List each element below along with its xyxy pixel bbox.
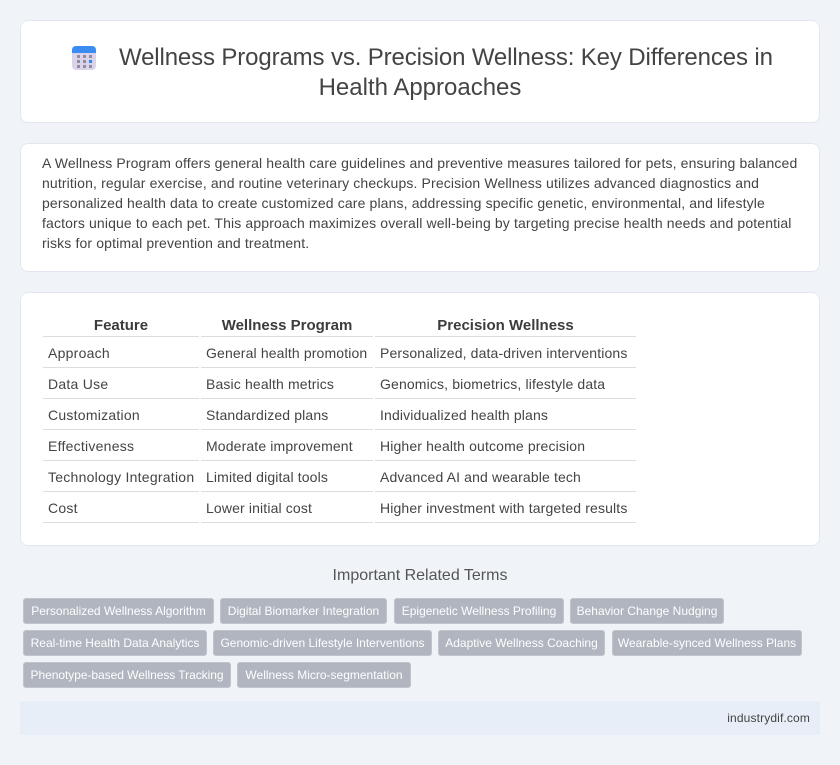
text: summary paragraph [42,155,797,251]
comparison table: Higher investment with targeted results [380,500,627,516]
comparison table: Wellness Program [222,317,352,334]
icon: calendar [72,46,96,70]
text: summary paragraph: factors unique to each pet. This approach maximizes overall well-being by targeting precise health needs and potential [42,215,792,231]
related term tags: Wearable-synced Wellness Plans [618,636,796,650]
related term tags: Personalized Wellness Algorithm [31,604,206,618]
related term tags: Behavior Change Nudging [577,604,717,618]
related term tags: Epigenetic Wellness Profiling [402,604,556,618]
comparison table: Individualized health plans [380,407,548,423]
comparison table: Data Use [48,376,108,392]
panel: summary [20,143,820,272]
related term tags: Digital Biomarker Integration [228,604,379,618]
comparison table: Approach [48,345,110,361]
comparison table: Lower initial cost [206,500,312,516]
comparison table: Technology Integration [48,469,194,485]
comparison table: Advanced AI and wearable tech [380,469,581,485]
related term tags: Real-time Health Data Analytics [31,636,199,650]
heading: related terms: Important Related Terms [333,567,507,584]
comparison table: Feature [94,317,148,334]
comparison table: Limited digital tools [206,469,328,485]
text: summary paragraph: nutrition, regular exercise, and routine veterinary checkups. Precision Wellness utilizes advanced diagnostics and [42,175,759,191]
footer: source: industrydif.com [727,711,810,725]
text: summary paragraph: A Wellness Program offers general health care guidelines and preventive measures tailored for pets, ensuring balanced [42,155,797,171]
title: Wellness Programs vs. Precision Wellness: Key Differences in [119,44,773,71]
related term tags: Wellness Micro-segmentation [245,668,403,682]
comparison table: Moderate improvement [206,438,353,454]
comparison table: General health promotion [206,345,367,361]
related term tags: Genomic-driven Lifestyle Interventions [220,636,425,650]
comparison table: Basic health metrics [206,376,334,392]
panel: title card [20,20,820,123]
related term tags: Phenotype-based Wellness Tracking [31,668,223,682]
title: Health Approaches [319,74,521,101]
comparison table [43,317,636,523]
text: summary paragraph: risks for optimal prevention and treatment. [42,235,309,251]
comparison table: Personalized, data-driven interventions [380,345,628,361]
comparison table: Genomics, biometrics, lifestyle data [380,376,605,392]
comparison table: Standardized plans [206,407,328,423]
comparison table: Customization [48,407,140,423]
related term tags [23,598,802,688]
related term tags: Adaptive Wellness Coaching [445,636,598,650]
comparison table: Effectiveness [48,438,134,454]
comparison table: Higher health outcome precision [380,438,585,454]
comparison table: Precision Wellness [437,317,574,334]
panel: comparison table [20,292,820,546]
comparison table: Cost [48,500,78,516]
text: summary paragraph: personalized health data to create customized care plans, addressing specific genetic, environmental, and lifestyle [42,195,765,211]
footer bar [20,701,820,735]
title [119,44,773,101]
